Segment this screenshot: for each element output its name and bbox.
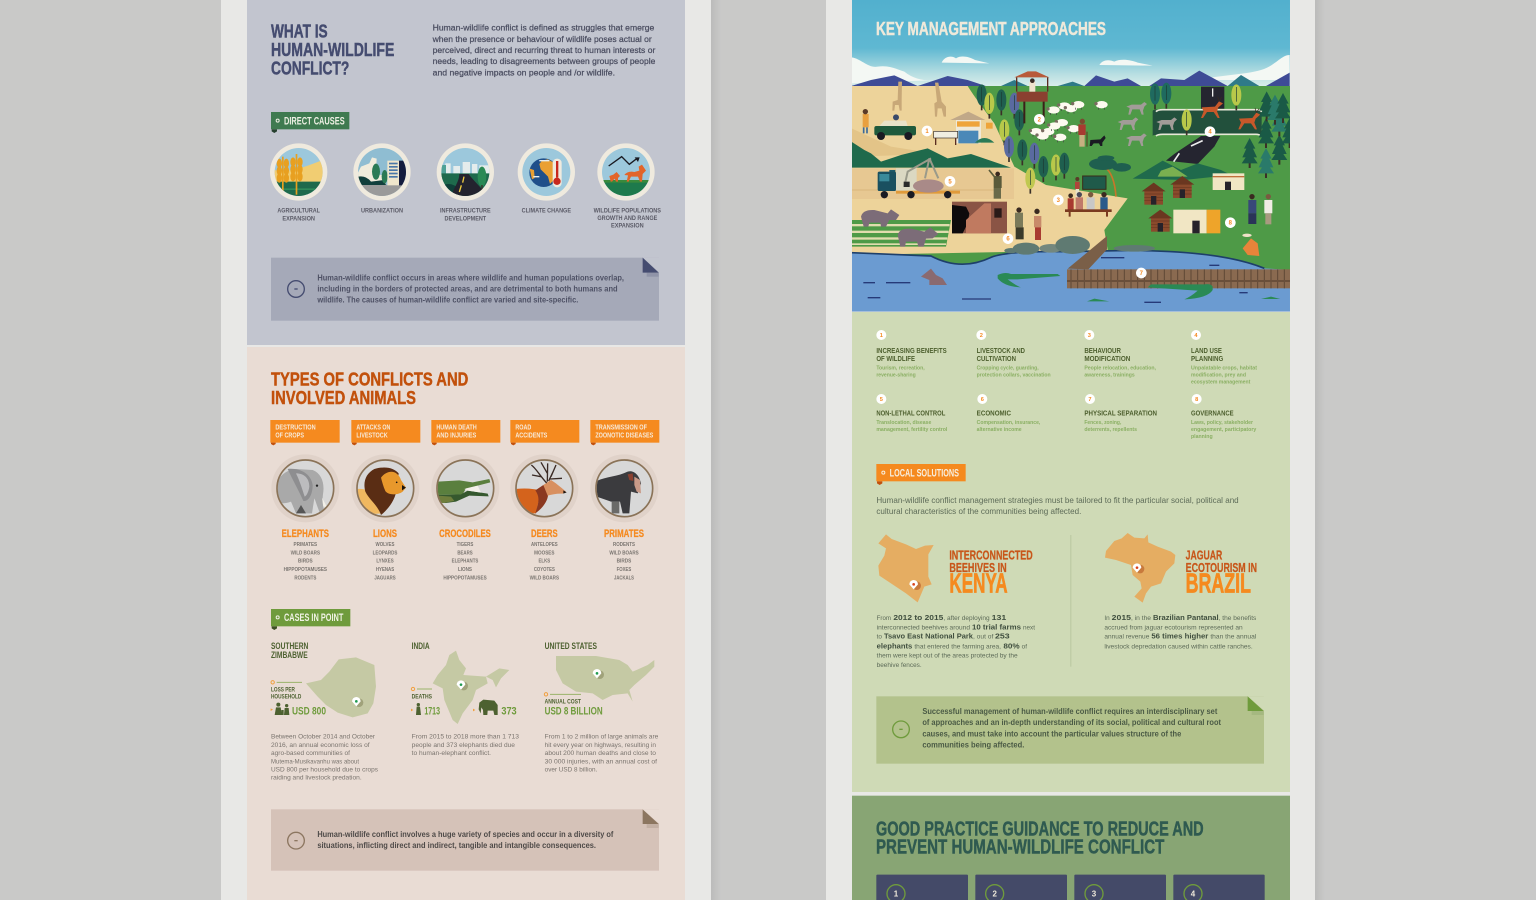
text: kenya case: interconnected beehives around	[877, 625, 970, 631]
panel: what is human-wildlife conflict	[247, 0, 685, 345]
animal lists: LEOPARDS	[373, 550, 398, 556]
approach descriptions: Laws, policy, stakeholder	[1191, 420, 1254, 426]
animal lists: JAGUARS	[374, 575, 396, 581]
right pines	[1242, 92, 1290, 178]
heading: what is: CONFLICT?	[271, 58, 349, 79]
text: kenya case: them were kept out of the areas protected by the	[877, 654, 1018, 660]
ground	[902, 86, 1290, 270]
approach descriptions: Unpalatable crops, habitat	[1191, 365, 1257, 371]
animal names	[282, 528, 644, 540]
approach descriptions: Fences, zoning,	[1084, 420, 1122, 426]
animal names: PRIMATES	[604, 528, 644, 540]
animal lists: RODENTS	[613, 542, 635, 548]
text: india case: From 2015 to 2018 more than 1 713	[412, 734, 519, 741]
labels: direct causes: URBANIZATION	[361, 208, 403, 215]
giraffes	[892, 82, 946, 117]
tag: direct causes: DIRECT CAUSES	[284, 116, 345, 128]
hills	[851, 142, 1011, 168]
labels: direct causes: CLIMATE CHANGE	[522, 208, 571, 215]
panel: types of conflicts and involved animals	[270, 368, 659, 581]
approach headings: ECONOMIC	[977, 409, 1012, 418]
overpass	[1150, 83, 1262, 164]
labels: direct causes: DEVELOPMENT	[444, 216, 486, 223]
approach descriptions: ecosystem management	[1191, 379, 1250, 385]
text: local solutions intro: cultural characteristics of the communities being affected.	[876, 506, 1081, 516]
classroom	[1065, 155, 1131, 217]
animal lists: ELKS	[538, 559, 550, 565]
case: zimbabwe heading and stats: LOSS PER	[271, 687, 295, 694]
sand	[851, 86, 1128, 255]
tag: local solutions: LOCAL SOLUTIONS	[890, 467, 959, 479]
approach headings: BEHAVIOUR	[1084, 346, 1122, 355]
wolves	[1118, 102, 1147, 146]
text: brazil case	[1104, 613, 1256, 650]
safari car	[863, 109, 916, 140]
text: definition: and negative impacts on people and /or wildlife.	[433, 67, 615, 77]
callout: successful management: causes, and must take into account the particular values structure of the	[922, 729, 1182, 738]
approach descriptions: engagement, participatory	[1191, 427, 1257, 433]
approach headings: INCREASING BENEFITS	[876, 346, 947, 355]
text: brazil case: annual revenue	[1104, 635, 1150, 641]
conflict type tags: OF CROPS	[275, 431, 304, 440]
approach descriptions: Translocation, disease	[876, 420, 931, 426]
case: united states heading and stats: UNITED STATES	[545, 641, 597, 651]
heading: good practice guidance: PREVENT HUMAN-WILDLIFE CONFLICT	[876, 837, 1164, 859]
map: india	[433, 651, 509, 724]
case: india heading and stats	[411, 641, 517, 718]
number markers: 5	[880, 397, 883, 403]
map: united states	[556, 656, 654, 702]
case: zimbabwe heading and stats: HOUSEHOLD	[271, 693, 301, 700]
conflict type tags	[270, 420, 659, 445]
number markers: 1	[880, 333, 883, 339]
icon: lion	[351, 454, 419, 522]
animal names: LIONS	[373, 528, 397, 540]
case: zimbabwe heading and stats: USD 800	[292, 706, 326, 718]
heading: brazil case: JAGUAR	[1186, 549, 1222, 563]
trees centre	[977, 84, 1069, 194]
animal lists: LYNXES	[376, 559, 394, 565]
text: kenya case	[877, 613, 1035, 669]
conflict type tags: LIVESTOCK	[356, 431, 388, 440]
water ripples	[863, 258, 1248, 302]
approach headings: MODIFICATION	[1084, 354, 1130, 363]
sky	[851, 0, 1290, 87]
striped field	[851, 220, 951, 247]
text: kenya case: of	[1022, 644, 1027, 650]
road band	[851, 168, 1014, 199]
text: brazil case: than the annual	[1210, 635, 1256, 641]
callout: variety of species	[271, 809, 659, 871]
animal lists: WILD BOARS	[530, 575, 559, 581]
text: definition: Human-wildlife conflict is defined as struggles that emerge	[433, 23, 655, 33]
text: india case	[412, 734, 519, 757]
animal lists: WOLVES	[375, 542, 395, 548]
labels: direct causes: EXPANSION	[282, 216, 315, 223]
approach descriptions: planning	[1191, 434, 1213, 440]
animal lists: BIRDS	[298, 559, 313, 565]
animal lists: HIPPOPOTAMUSES	[443, 575, 487, 581]
text: brazil case: , the benefits	[1219, 616, 1256, 622]
animal lists: PRIMATES	[293, 542, 317, 548]
case: united states heading and stats: ANNUAL COST	[545, 698, 581, 705]
building and sign	[934, 112, 994, 145]
text: kenya case: that entered the farming area,	[914, 644, 1001, 650]
panel: management approaches list	[876, 330, 1257, 516]
hippos	[861, 209, 938, 247]
case: india heading and stats: INDIA	[412, 641, 430, 651]
labels: direct causes	[277, 208, 661, 229]
rocks	[1004, 236, 1155, 255]
water	[851, 251, 1291, 312]
heading: kenya case: INTERCONNECTED	[949, 549, 1033, 563]
guidance cards	[876, 875, 1265, 900]
case: india heading and stats: 1713	[424, 706, 440, 718]
heading: brazil case: BRAZIL	[1186, 568, 1251, 599]
text: us case: From 1 to 2 million of large animals are	[545, 734, 659, 741]
conflict type tags: ROAD	[515, 423, 532, 432]
animal names: CROCODILES	[439, 528, 491, 540]
approach descriptions: Tourism, recreation,	[876, 365, 925, 371]
conflict type tags: HUMAN DEATH	[436, 423, 477, 432]
text: kenya case: to	[877, 635, 883, 641]
text: kenya case: Tsavo East National Park	[884, 632, 974, 641]
text: india case: people and 373 elephants died due	[412, 742, 515, 749]
text: brazil case: accrued from jaguar ecotourism represented an	[1104, 625, 1243, 631]
two people handshake	[1015, 207, 1041, 240]
labels: direct causes: INFRASTRUCTURE	[440, 208, 491, 215]
callout: variety of species: Human-wildlife conflict involves a huge variety of species and occur in a diversity of	[317, 830, 614, 839]
conflict type tags: DESTRUCTION	[275, 423, 316, 432]
map: zimbabwe	[306, 657, 376, 717]
case: united states heading and stats	[544, 641, 603, 718]
animal lists: BIRDS	[617, 559, 632, 565]
approach descriptions: alternative income	[977, 427, 1022, 433]
text: kenya case: beehive fences.	[877, 663, 922, 669]
animal lists: RODENTS	[294, 575, 317, 581]
guidance cards: 3	[1092, 890, 1097, 899]
labels: direct causes: GROWTH AND RANGE	[597, 215, 658, 222]
map: brazil	[1105, 533, 1175, 603]
approach descriptions: management, fertility control	[876, 427, 948, 433]
cave	[952, 202, 1007, 233]
heading: types of conflicts: INVOLVED ANIMALS	[271, 387, 416, 408]
conflict type tags: ACCIDENTS	[515, 431, 547, 440]
guidance cards: 4	[1191, 890, 1196, 899]
ranger	[989, 170, 1002, 199]
sheep herd	[1029, 101, 1108, 142]
icon: wildlife populations	[597, 143, 655, 201]
right sheet	[826, 0, 1325, 900]
text: kenya case: , out of	[973, 635, 994, 641]
text: brazil case: Brazilian Pantanal	[1153, 613, 1219, 622]
tag: cases in point	[271, 609, 350, 630]
callout: successful management: communities being affected.	[922, 740, 1024, 749]
approach descriptions: revenue-sharing	[876, 372, 916, 378]
text: us case	[545, 734, 659, 773]
text: us case: hit every year on highways, resulting in	[545, 742, 656, 749]
approach headings: PHYSICAL SEPARATION	[1084, 409, 1157, 418]
text: kenya case: next	[1023, 625, 1035, 631]
numbered markers: 8	[1229, 221, 1233, 227]
approach descriptions: protection collars, vaccination	[977, 372, 1051, 378]
clouds	[851, 55, 1290, 83]
text: kenya case: , after deploying	[943, 616, 990, 622]
icon: agricultural expansion	[270, 143, 327, 201]
numbered markers: 7	[1140, 271, 1144, 277]
panel: local solutions case studies	[852, 533, 1290, 900]
animal lists: FOXES	[617, 567, 631, 573]
text: us case: over USD 8 billion.	[545, 766, 598, 773]
animal lists: WILD BOARS	[291, 550, 320, 556]
animal names: ELEPHANTS	[282, 528, 329, 540]
animal lists: HYENAS	[376, 567, 394, 573]
tag: local solutions	[876, 464, 966, 485]
conflict type tags: ATTACKS ON	[356, 423, 391, 432]
numbered markers: 5	[948, 179, 952, 185]
panel: good practice guidance	[852, 796, 1290, 900]
text: us case: about 200 human deaths and close to	[545, 750, 656, 757]
animal names: DEERS	[531, 528, 558, 540]
icon: infrastructure development	[437, 143, 494, 201]
mountains	[851, 71, 1290, 87]
heading: types of conflicts: TYPES OF CONFLICTS AND	[271, 368, 468, 389]
heading: types of conflicts	[271, 368, 468, 408]
animal lists	[284, 542, 639, 581]
text: definition: needs, leading to disagreements between groups of people	[433, 56, 656, 66]
case: zimbabwe heading and stats: ZIMBABWE	[271, 650, 308, 660]
approach headings: LAND USE	[1191, 346, 1222, 355]
number markers: 3	[1088, 333, 1091, 339]
approach headings: LIVESTOCK AND	[977, 346, 1025, 355]
approach headings: OF WILDLIFE	[876, 354, 915, 363]
numbered markers: 6	[1006, 237, 1010, 243]
text: kenya case: 80%	[1003, 641, 1020, 650]
heading: what is: WHAT IS	[271, 20, 328, 41]
field worker	[1242, 234, 1259, 256]
icon: climate change	[518, 143, 575, 201]
guidance cards: 1	[894, 890, 899, 899]
animal lists: HIPPOPOTAMUSES	[284, 567, 327, 573]
heading: brazil case	[1186, 549, 1257, 599]
approach descriptions: Cropping cycle, guarding,	[977, 365, 1039, 371]
conflict type tags: AND INJURIES	[436, 431, 476, 440]
approach descriptions: Compensation, insurance,	[977, 420, 1041, 426]
tag: direct causes	[271, 112, 349, 133]
callout: where conflict occurs: including in the borders of protected areas, and are detrimental to both humans and	[317, 284, 618, 293]
text: brazil case: 2015	[1112, 613, 1131, 622]
approach descriptions: modification, prey and	[1191, 372, 1246, 378]
labels: direct causes: EXPANSION	[611, 222, 644, 229]
labels: direct causes: AGRICULTURAL	[277, 208, 320, 215]
animal lists: ELEPHANTS	[452, 559, 478, 565]
shepherd and dog	[1078, 119, 1106, 147]
heading: good practice guidance	[876, 818, 1204, 859]
case: zimbabwe heading and stats: SOUTHERN	[271, 641, 308, 651]
text: definition: when the presence or behaviour of wildlife poses actual or	[432, 34, 652, 44]
tag: cases in point: CASES IN POINT	[284, 612, 343, 624]
heading: brazil case: ECOTOURISM IN	[1186, 561, 1257, 575]
text: brazil case: 56 times higher	[1151, 632, 1208, 641]
fence	[1067, 236, 1291, 288]
panel: key management approaches illustration	[851, 0, 1298, 312]
text: us case: 30 000 injuries, with an annual cost of	[545, 758, 657, 765]
callout: successful management	[876, 696, 1264, 764]
number markers: 6	[981, 397, 984, 403]
numbered markers: 1	[925, 129, 929, 135]
text: brazil case: , in the	[1131, 616, 1152, 622]
number markers: 2	[980, 333, 983, 339]
text: kenya case: 10 trial farms	[972, 622, 1021, 631]
icon: deer	[510, 454, 578, 522]
heading: what is	[271, 20, 394, 79]
icon: primate	[590, 454, 658, 522]
text: zimbabwe case: 2016, an annual economic loss of	[271, 742, 370, 749]
number markers: 8	[1195, 397, 1198, 403]
text: india case: to human-elephant conflict.	[412, 750, 491, 757]
green hills	[1133, 161, 1231, 180]
animal lists: BEARS	[457, 550, 473, 556]
text: brazil case: livestock depredation caused within cattle ranches.	[1104, 644, 1253, 650]
numbered markers: 3	[1057, 198, 1061, 204]
approach headings: NON-LETHAL CONTROL	[876, 409, 946, 418]
animal lists: ANTELOPES	[531, 542, 558, 548]
animal lists: TIGERS	[457, 542, 474, 548]
text: local solutions intro: Human-wildlife conflict management strategies must be tailored to fit the particular social, political and	[876, 495, 1239, 505]
text: kenya case: From	[877, 616, 891, 622]
approach descriptions	[876, 365, 1257, 440]
numbered markers: 4	[1208, 130, 1212, 136]
text: zimbabwe case: Between October 2014 and October	[271, 734, 375, 741]
callout: variety of species: situations, inflicting direct and indirect, tangible and intangible consequences.	[317, 841, 596, 850]
callout: successful management: of approaches and an in-depth understanding of its social, political and cultural root	[922, 718, 1221, 727]
text: zimbabwe case	[271, 734, 378, 781]
approach descriptions: deterrents, repellents	[1084, 427, 1137, 433]
text: kenya case: 2012 to 2015	[893, 613, 943, 622]
heading: kenya case	[949, 549, 1033, 599]
case: united states heading and stats: USD 8 BILLION	[545, 706, 603, 718]
heading: kenya case: BEEHIVES IN	[949, 561, 1007, 575]
conflict type tags: ZOONOTIC DISEASES	[595, 431, 653, 440]
approach headings: CULTIVATION	[977, 354, 1016, 363]
text: kenya case: 131	[992, 613, 1006, 622]
conflict type tags: TRANSMISSION OF	[595, 423, 647, 432]
heading: kenya case: KENYA	[949, 568, 1008, 599]
animal lists: WILD BOARS	[609, 550, 639, 556]
map: kenya	[878, 534, 934, 602]
houses and huts	[1142, 173, 1244, 233]
truck with hippo	[878, 158, 960, 198]
approach descriptions: People relocation, education,	[1084, 365, 1156, 371]
icon: crocodile	[431, 454, 499, 522]
heading: what is: HUMAN-WILDLIFE	[271, 39, 394, 60]
approach headings	[876, 346, 1234, 418]
text: definition	[432, 23, 656, 77]
crocodiles and hippo in water	[921, 269, 1280, 301]
icon: urbanization	[353, 143, 411, 201]
approach headings: PLANNING	[1191, 354, 1224, 363]
text: brazil case: In	[1104, 616, 1110, 622]
lookout tower	[1014, 71, 1049, 123]
text: zimbabwe case: Mutema-Musikavanhu was about	[271, 758, 359, 765]
case: india heading and stats: 373	[501, 706, 517, 718]
officials	[1248, 194, 1272, 224]
animal lists: COYOTES	[534, 567, 555, 573]
text: zimbabwe case: USD 800 per household due to crops	[271, 766, 378, 773]
number markers	[876, 330, 1202, 404]
approach headings: GOVERNANCE	[1191, 409, 1234, 418]
heading: good practice guidance: GOOD PRACTICE GUIDANCE TO REDUCE AND	[876, 818, 1204, 840]
numbered markers	[922, 114, 1236, 278]
number markers: 4	[1194, 333, 1198, 339]
text: kenya case: elephants	[877, 641, 912, 650]
numbered markers: 2	[1038, 117, 1042, 123]
callout: where conflict occurs: Human-wildlife conflict occurs in areas where wildlife and human populations overlap,	[317, 273, 624, 282]
animal lists: LIONS	[458, 567, 472, 573]
sand shade	[852, 128, 917, 156]
panel: types of conflicts background	[247, 347, 685, 900]
callout: where conflict occurs	[271, 258, 659, 321]
text: zimbabwe case: agro-based communities of	[271, 750, 350, 757]
guidance cards: 2	[992, 890, 997, 899]
case: zimbabwe heading and stats	[271, 641, 326, 718]
text: local solutions intro	[876, 495, 1239, 516]
callout: where conflict occurs: wildlife. The causes of human-wildlife conflict are varied and site-specific.	[316, 295, 578, 304]
case: india heading and stats: DEATHS	[412, 693, 432, 700]
labels: direct causes: WILDLIFE POPULATIONS	[594, 208, 661, 215]
animal lists: MOOSES	[534, 550, 555, 556]
animal lists: JACKALS	[614, 575, 634, 581]
number markers: 7	[1088, 397, 1092, 403]
heading: key management approaches: KEY MANAGEMENT APPROACHES	[876, 18, 1106, 39]
left sheet	[221, 0, 721, 900]
approach descriptions: awareness, trainings	[1084, 372, 1135, 378]
callout: successful management: Successful management of human-wildlife conflict requires an interdisciplinary set	[922, 707, 1218, 716]
icon: elephant	[271, 454, 339, 522]
text: zimbabwe case: raiding and livestock predation.	[271, 774, 362, 781]
panel: management background	[852, 312, 1290, 792]
text: kenya case: 253	[995, 632, 1010, 641]
text: definition: perceived, direct and recurring threat to human interests or	[433, 45, 655, 55]
panel: cases in point	[271, 609, 659, 871]
